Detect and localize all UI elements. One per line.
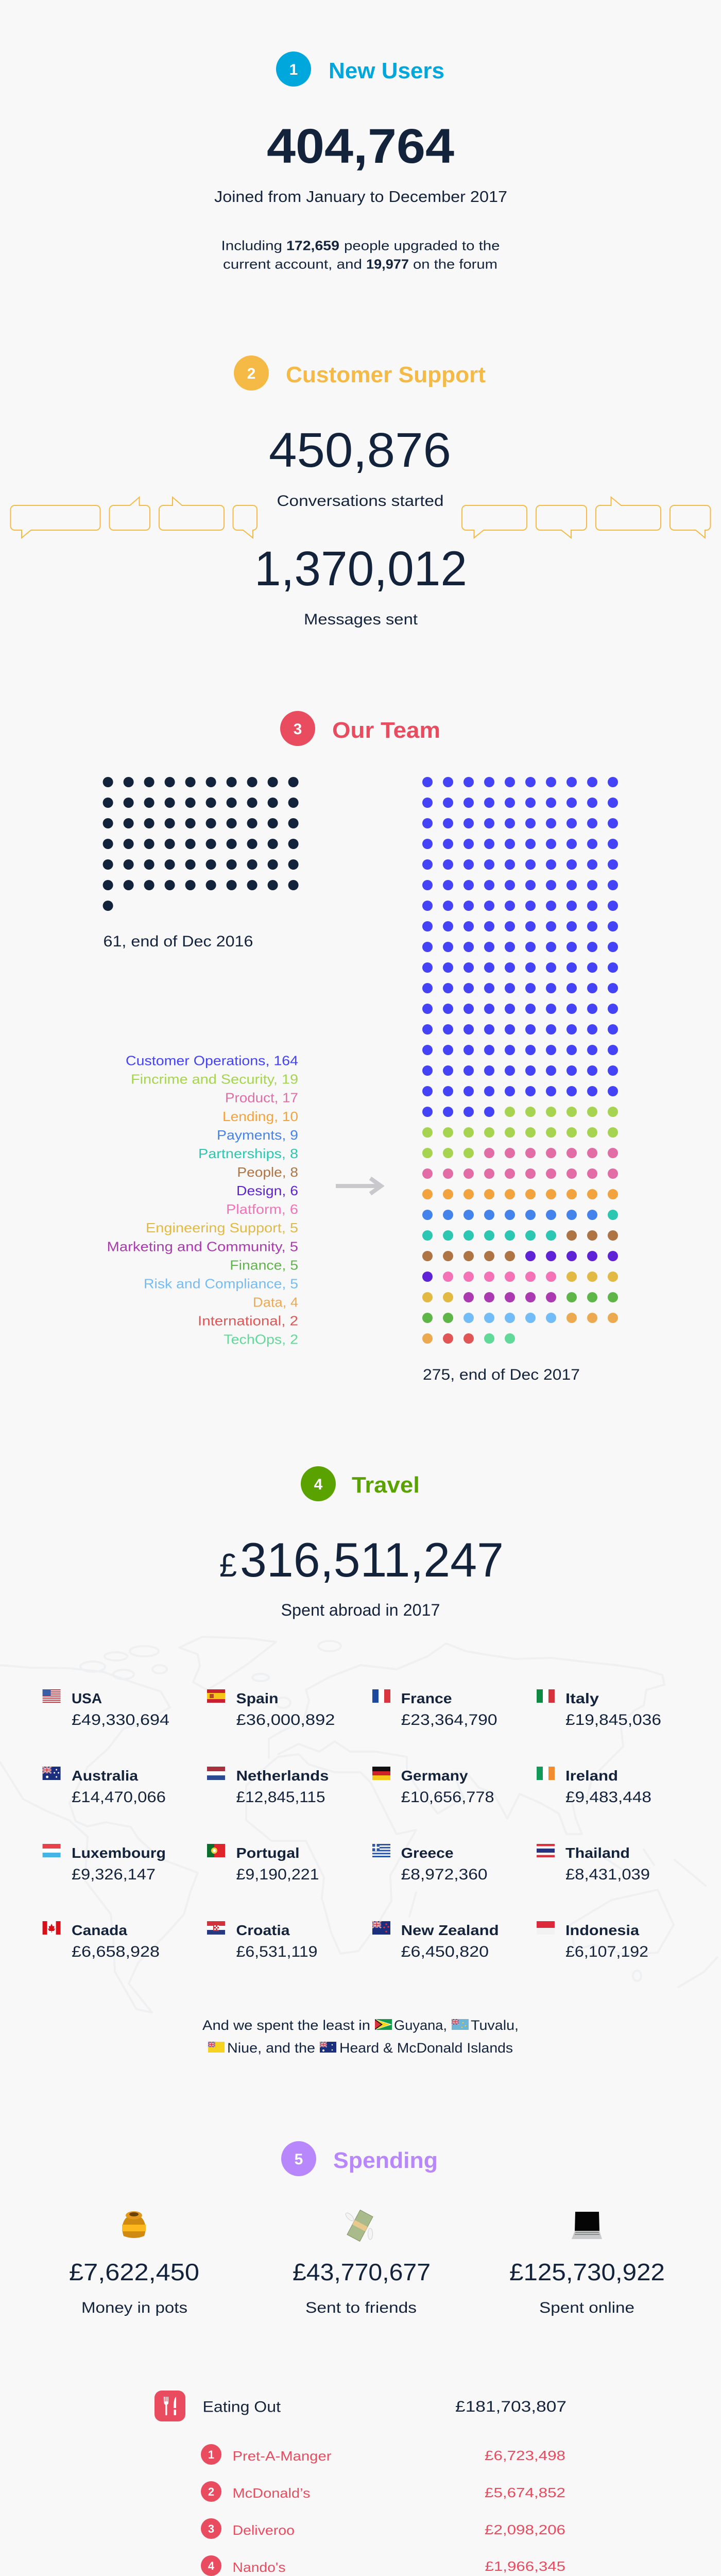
- caption: 275 end of Dec 2017: 275, end of Dec 2017: [423, 1366, 580, 1383]
- country: Netherlands: [207, 1767, 329, 1806]
- country: Spain: [207, 1689, 335, 1728]
- heading: our team: 3: [294, 721, 302, 738]
- stat: sent to friends: Sent to friends: [305, 2299, 417, 2316]
- ranking: Pret-A-Manger: Pret-A-Manger: [233, 2448, 332, 2464]
- stat: sent to friends: [293, 2259, 431, 2316]
- legend: teams: Fincrime and Security, 19: [131, 1072, 298, 1087]
- arrow: [336, 1178, 381, 1194]
- caption: messages sent: Messages sent: [304, 611, 418, 628]
- country: Thailand: £8,431,039: [565, 1866, 650, 1883]
- section 4: travel: [0, 1466, 717, 2056]
- country: Australia: [43, 1767, 166, 1806]
- country: Netherlands: £12,845,115: [236, 1789, 325, 1806]
- icon: money with wings: [345, 2210, 373, 2241]
- heading: spending: Spending: [333, 2148, 438, 2173]
- heading: customer support: Customer Support: [286, 362, 486, 387]
- ranking: Deliveroo: Deliveroo: [233, 2522, 295, 2538]
- icon: flag Niue: [208, 2042, 225, 2053]
- country: Ireland: Ireland: [565, 1768, 618, 1784]
- caption: spent abroad: Spent abroad in 2017: [281, 1601, 440, 1619]
- text block: upgrades: people upgraded to the: [344, 238, 500, 253]
- section 5: spending: [69, 2141, 665, 2576]
- legend: teams: [107, 1053, 298, 1347]
- stat: 404,764: 404,764: [267, 119, 454, 174]
- ranking: McDonald's: McDonald’s: [233, 2485, 310, 2501]
- text block: least spent countries: Heard & McDonald Islands: [339, 2040, 513, 2056]
- country: New Zealand: £6,450,820: [401, 1943, 489, 1960]
- country: Canada: Canada: [72, 1922, 127, 1938]
- legend: teams: People, 8: [237, 1164, 298, 1180]
- country: Spain: £36,000,892: [236, 1711, 335, 1728]
- country: Canada: £6,658,928: [72, 1943, 160, 1960]
- stat: spent online: [509, 2259, 665, 2316]
- world map background: [0, 1637, 717, 2012]
- country: Australia: Australia: [72, 1768, 138, 1784]
- legend: teams: Platform, 6: [226, 1201, 298, 1217]
- category: eating out: Eating Out: [203, 2399, 281, 2415]
- country: Portugal: £9,190,221: [236, 1866, 319, 1883]
- ranking: Deliveroo: 3: [208, 2522, 214, 2535]
- country: Greece: £8,972,360: [401, 1866, 488, 1883]
- text block: upgrades: Including: [221, 238, 282, 253]
- dot grid: 61 people end of 2016: [108, 782, 294, 906]
- stat: sent to friends: £43,770,677: [293, 2259, 431, 2285]
- ranking: Pret-A-Manger: 1: [208, 2448, 214, 2461]
- heading: spending: [281, 2141, 438, 2176]
- country: Greece: [372, 1844, 488, 1883]
- legend: teams: TechOps, 2: [224, 1332, 298, 1347]
- ranking: Nando's: £1,966,345: [485, 2558, 565, 2574]
- country: Croatia: £6,531,119: [236, 1943, 317, 1960]
- country: Indonesia: £6,107,192: [565, 1943, 648, 1960]
- text block: upgrades: 172,659: [286, 238, 339, 253]
- country: Germany: [372, 1767, 494, 1806]
- ranking: McDonald's: 2: [208, 2485, 214, 2498]
- text block: least spent countries: [202, 2018, 519, 2056]
- legend: teams: Engineering Support, 5: [146, 1220, 298, 1235]
- caption: 61 end of Dec 2016: 61, end of Dec 2016: [103, 933, 253, 950]
- country: Croatia: Croatia: [236, 1922, 290, 1938]
- country: Italy: £19,845,036: [565, 1711, 661, 1728]
- stat: spent online: Spent online: [539, 2299, 634, 2316]
- stat: spent abroad: £: [219, 1547, 237, 1584]
- country: New Zealand: [372, 1921, 499, 1960]
- icon: flag Heard and McDonald Islands: [320, 2042, 336, 2053]
- caption: conversations started: Conversations started: [277, 493, 444, 510]
- heading: travel: 4: [314, 1476, 323, 1493]
- ranking: Deliveroo: [201, 2518, 565, 2539]
- country: USA: USA: [72, 1690, 102, 1706]
- speech bubbles: [10, 497, 711, 538]
- ranking: Nando's: [201, 2555, 565, 2576]
- section 3: our team: [103, 711, 613, 1383]
- stat: money in pots: Money in pots: [81, 2299, 187, 2316]
- country: Luxembourg: [43, 1844, 166, 1883]
- country: France: £23,364,790: [401, 1711, 497, 1728]
- icon: flag Guyana: [375, 2019, 392, 2030]
- country: USA: £49,330,694: [72, 1711, 169, 1728]
- heading: new users: New Users: [329, 58, 444, 83]
- ranking: Pret-A-Manger: £6,723,498: [485, 2448, 565, 2463]
- country: Spain: Spain: [236, 1690, 278, 1706]
- ranking: McDonald's: [201, 2481, 565, 2502]
- heading: new users: 1: [289, 61, 298, 78]
- legend: teams: Marketing and Community, 5: [107, 1239, 298, 1254]
- country: Ireland: £9,483,448: [565, 1789, 651, 1806]
- country: USA: [43, 1689, 169, 1728]
- country: Luxembourg: £9,326,147: [72, 1866, 156, 1883]
- section 2: customer support: [10, 355, 711, 628]
- country: France: France: [401, 1690, 452, 1706]
- country: Canada: [43, 1921, 160, 1960]
- text block: least spent countries: Tuvalu,: [471, 2018, 519, 2033]
- icon: honey pot: [122, 2211, 146, 2238]
- legend: teams: Risk and Compliance, 5: [144, 1276, 298, 1291]
- country: Portugal: [207, 1844, 319, 1883]
- ranking: McDonald's: £5,674,852: [485, 2485, 565, 2500]
- country: France: [372, 1689, 497, 1728]
- heading: new users: [276, 52, 444, 87]
- heading: customer support: [234, 355, 486, 391]
- text block: least spent countries: Niue, and the: [227, 2040, 315, 2056]
- icon: laptop: [572, 2212, 602, 2239]
- heading: travel: Travel: [352, 1472, 420, 1498]
- legend: teams: Partnerships, 8: [198, 1146, 298, 1161]
- heading: travel: [301, 1466, 420, 1501]
- country: Indonesia: [537, 1921, 648, 1960]
- stat: conversations: 450,876: [269, 423, 451, 478]
- heading: customer support: 2: [247, 365, 255, 382]
- icon: fork and knife: [154, 2391, 185, 2421]
- country: Greece: Greece: [401, 1845, 454, 1861]
- stat: spent abroad: 316,511,247: [240, 1533, 504, 1587]
- heading: spending: 5: [295, 2151, 303, 2168]
- ranking: Pret-A-Manger: [201, 2444, 565, 2465]
- country: Portugal: Portugal: [236, 1845, 300, 1861]
- category: eating out: £181,703,807: [455, 2398, 566, 2415]
- country: New Zealand: New Zealand: [401, 1922, 499, 1938]
- icon: flag Tuvalu: [452, 2019, 469, 2030]
- country: Luxembourg: Luxembourg: [72, 1845, 166, 1861]
- country: Indonesia: Indonesia: [565, 1922, 639, 1938]
- heading: our team: Our Team: [332, 718, 440, 743]
- legend: teams: Payments, 9: [217, 1127, 298, 1143]
- country: Croatia: [207, 1921, 317, 1960]
- country: Thailand: [537, 1844, 650, 1883]
- legend: teams: Customer Operations, 164: [126, 1053, 298, 1069]
- text block: least spent countries: Guyana,: [394, 2018, 447, 2033]
- country: Italy: Italy: [565, 1690, 599, 1706]
- heading: our team: [280, 711, 440, 746]
- legend: teams: Product, 17: [225, 1090, 298, 1106]
- country: Germany: £10,656,778: [401, 1789, 494, 1806]
- ranking: Deliveroo: £2,098,206: [485, 2522, 565, 2537]
- legend: teams: International, 2: [198, 1313, 298, 1328]
- text block: upgrades: current account, and: [223, 257, 362, 272]
- country: Thailand: Thailand: [565, 1845, 630, 1861]
- stat: spent online: £125,730,922: [509, 2259, 665, 2285]
- ranking: Nando's: 4: [208, 2560, 215, 2572]
- category: eating out: [154, 2391, 566, 2421]
- stat: money in pots: £7,622,450: [69, 2259, 199, 2285]
- legend: teams: Finance, 5: [230, 1257, 298, 1273]
- text block: upgrades: [221, 238, 500, 272]
- country: Italy: [537, 1689, 661, 1728]
- ranking: Nando's: Nando's: [233, 2560, 285, 2575]
- stat: messages: 1,370,012: [254, 541, 467, 596]
- stat: money in pots: [69, 2259, 199, 2316]
- text block: least spent countries: And we spent the least in: [202, 2018, 370, 2033]
- legend: teams: Lending, 10: [222, 1109, 298, 1124]
- dot grid: 275 people end of 2017: [427, 782, 613, 1338]
- text block: upgrades: on the forum: [413, 257, 497, 272]
- country: Germany: Germany: [401, 1768, 468, 1784]
- legend: teams: Data, 4: [253, 1294, 298, 1310]
- country: Australia: £14,470,066: [72, 1789, 166, 1806]
- text block: upgrades: 19,977: [366, 257, 409, 272]
- country: Ireland: [537, 1767, 651, 1806]
- caption: joined: Joined from January to December 2017: [214, 188, 507, 206]
- legend: teams: Design, 6: [236, 1183, 298, 1198]
- section 1: new users: [214, 52, 507, 272]
- country: Netherlands: Netherlands: [236, 1768, 329, 1784]
